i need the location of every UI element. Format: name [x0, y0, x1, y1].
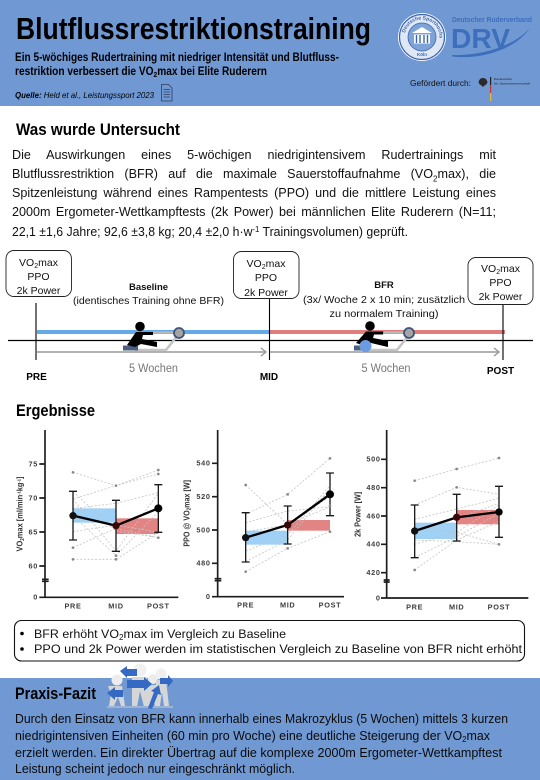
- measurement box PRE: PPO: [27, 271, 50, 283]
- takeaway text: Durch den Einsatz von BFR kann innerhalb eines Makrozyklus (5 Wochen) mittels 3 kurzen: [15, 712, 508, 726]
- subtitle: max bei Elite Ruderern: [157, 66, 267, 78]
- y axis label: max [W]: [181, 480, 191, 508]
- tick labels: 460: [366, 511, 381, 520]
- tick labels: POST: [147, 601, 170, 610]
- y axis label: max [ml/min: [15, 495, 25, 538]
- funding note: Gefördert durch:: [410, 78, 471, 88]
- source citation: Quelle: Held et al., Leistungssport 2023: [15, 90, 154, 100]
- icon: document: [162, 84, 172, 101]
- key findings box: BFR erhöht VO: [34, 627, 117, 641]
- key findings box: [14, 620, 524, 661]
- chart: 2k Power: [353, 430, 528, 611]
- header band: [0, 0, 540, 106]
- marker lines: [36, 299, 503, 360]
- takeaway text: max: [467, 729, 491, 743]
- measurement box MID: 2: [262, 264, 266, 271]
- key findings box: max im Vergleich zu Baseline: [124, 627, 286, 641]
- band: baseline change: [73, 508, 116, 523]
- band: baseline change: [415, 523, 457, 539]
- logo: Deutscher Ruderverband DRV: DRV: [451, 23, 510, 54]
- key findings box: 2: [119, 633, 124, 642]
- phase bar: BFR: [269, 330, 505, 334]
- subtitle: Ein 5-wöchiges Rudertraining mit niedriger Intensität und Blutfluss-: [15, 52, 339, 64]
- tick labels: 75: [28, 459, 38, 468]
- y axis label: 2: [187, 508, 193, 510]
- label: Baseline: (identisches Training ohne BFR): [73, 295, 224, 307]
- logo: Bundesinstitut für Sportwissenschaft: Bundesinstitut: [494, 77, 512, 81]
- tick labels: POST: [319, 600, 341, 609]
- axes: [212, 430, 344, 597]
- measurement box POST: 2k Power: [479, 291, 523, 303]
- icon: rower baseline: [123, 322, 184, 350]
- axes: [39, 430, 178, 597]
- y axis label: 2: [20, 538, 26, 541]
- study description paragraph: [12, 148, 496, 239]
- phase bar: Baseline: [37, 330, 269, 334]
- tick labels: [196, 459, 341, 609]
- measurement box POST: [468, 258, 533, 304]
- tick labels: MID: [280, 600, 295, 609]
- measurement box PRE: [6, 250, 72, 297]
- tick labels: 520: [196, 492, 211, 501]
- tick labels: PRE: [237, 600, 254, 609]
- tick labels: PRE: [406, 602, 423, 611]
- band: BFR change: [288, 520, 330, 531]
- logo: Deutsche Sporthochschule Köln: [398, 13, 446, 61]
- label: BFR: zu normalem Training): [330, 308, 438, 320]
- y axis label: PPO @ VO: [181, 503, 191, 547]
- tick labels: 0: [33, 593, 38, 602]
- subtitle: restriktion verbessert die VO: [15, 66, 172, 78]
- study timeline: [6, 250, 533, 383]
- chart: VO2max: [15, 430, 178, 610]
- study description paragraph: Trainingsvolumen) geprüft.: [259, 225, 408, 239]
- title: Blutflussrestriktionstraining: [16, 11, 371, 46]
- label: Baseline: [73, 282, 224, 307]
- takeaway text: niedrigintensiven Einheiten (60 min pro Woche) eine deutliche Steigerung der VO: [15, 729, 468, 743]
- tick labels: 65: [28, 527, 38, 536]
- measurement box MID: PPO: [255, 272, 277, 284]
- label: 5 Wochen left: 5 Wochen: [129, 363, 178, 375]
- heading: Praxis-Fazit: Praxis-Fazit: [15, 685, 96, 703]
- mean line with error bars: [411, 457, 503, 571]
- tick labels: MID: [449, 602, 464, 611]
- measurement box POST: max: [500, 263, 521, 275]
- tick labels: MID: [108, 601, 124, 610]
- individual athletes: [73, 470, 158, 559]
- measurement box PRE: VO: [19, 257, 34, 269]
- mean line with error bars: [69, 469, 162, 561]
- mean line with error bars: [242, 457, 334, 573]
- label: BFR: [303, 280, 465, 320]
- measurement box PRE: max: [38, 257, 59, 269]
- band: BFR change: [116, 518, 158, 534]
- tick labels: 480: [366, 483, 381, 492]
- time axis: [8, 340, 533, 342]
- measurement box POST: VO: [481, 263, 496, 275]
- band: BFR change: [457, 510, 499, 524]
- icon: rower BFR with blue cuff: [354, 321, 414, 352]
- measurement box MID: max: [266, 258, 286, 270]
- logo: Deutscher Ruderverband DRV: [451, 15, 532, 57]
- study description paragraph: 22,1 ±1,6 Jahre; 92,6 ±3,8 kg; 20,4 ±2,0 h·w: [12, 225, 259, 239]
- takeaway text: 2: [462, 735, 467, 744]
- tick labels: PRE: [64, 601, 82, 610]
- logo: Deutsche Sporthochschule Köln: Köln: [417, 52, 427, 57]
- y axis label: 2k Power [W]: [353, 492, 363, 537]
- label: POST: POST: [487, 366, 514, 377]
- y axis label: -1: [16, 491, 21, 495]
- tick labels: 500: [366, 455, 381, 464]
- individual athletes: [415, 458, 499, 570]
- y axis label: ]: [15, 476, 25, 479]
- measurement box PRE: 2: [34, 263, 38, 270]
- measurement box POST: PPO: [489, 277, 512, 289]
- takeaway text: Leistung scheint jedoch nur eingeschränkt möglich.: [15, 762, 295, 776]
- tick labels: 440: [366, 540, 381, 549]
- tick labels: 70: [28, 493, 38, 502]
- label: MID: MID: [260, 372, 278, 383]
- heading: Ergebnisse: Ergebnisse: [16, 402, 95, 420]
- subtitle: 2: [154, 70, 157, 79]
- study description paragraph: -1: [252, 225, 260, 234]
- study description paragraph: 2000m Ergometer-Wettkampftests (2k Power) bei männlichen Elite Ruderern (N=11;: [12, 205, 496, 219]
- y axis label: kg: [15, 483, 25, 491]
- arrow: Baseline 5 weeks: [37, 348, 266, 356]
- practical takeaway band: [0, 678, 540, 780]
- band: baseline change: [246, 531, 288, 545]
- measurement box POST: 2: [496, 269, 500, 276]
- tick labels: 60: [28, 561, 38, 570]
- logo: Bundesinstitut für Sportwissenschaft: [478, 77, 530, 101]
- tick labels: 0: [206, 592, 211, 601]
- measurement box MID: [234, 252, 299, 299]
- tick labels: [28, 459, 170, 610]
- individual athletes: [246, 458, 330, 572]
- takeaway text: erzielt werden. Ein direkter Übertrag auf die komplexe 2000m Ergometer-Wettkampftest: [15, 746, 502, 760]
- chart: PPO: [181, 430, 344, 609]
- tick labels: 480: [196, 559, 211, 568]
- study description paragraph: Spitzenleistung während eines Rampentests (PPO) und die mittlere Leistung eines: [12, 186, 496, 200]
- tick labels: 540: [196, 459, 211, 468]
- tick labels: 420: [366, 568, 381, 577]
- subtitle: [15, 52, 339, 79]
- measurement box MID: VO: [247, 258, 262, 270]
- label: BFR: BFR: [374, 280, 394, 291]
- tick labels: 0: [376, 593, 381, 602]
- logo: Bundesinstitut für Sportwissenschaft: für Sportwissenschaft: [494, 82, 530, 86]
- measurement box PRE: 2k Power: [17, 285, 61, 297]
- y axis label: VO: [15, 539, 25, 551]
- logo: Deutscher Ruderverband DRV: Deutscher Ruderverband: [452, 15, 532, 24]
- key findings box: PPO und 2k Power werden im statistischen Vergleich zu Baseline von BFR nicht erhöht: [34, 642, 523, 656]
- label: Baseline: Baseline: [129, 282, 168, 293]
- tick labels: POST: [488, 602, 510, 611]
- tick labels: 500: [196, 525, 211, 534]
- axes: [381, 430, 528, 598]
- study description paragraph: Die Auswirkungen eines 5-wöchigen niedrigintensivem Rudertrainings mit: [12, 148, 496, 162]
- measurement box MID: 2k Power: [244, 287, 288, 299]
- label: BFR: (3x/ Woche 2 x 10 min; zusätzlich: [303, 294, 465, 306]
- study description paragraph: Blutflussrestriktion (BFR) auf die maximale Sauerstoffaufnahme (VO2max), die: [12, 167, 496, 184]
- icon: figures holding arrows: [107, 664, 173, 709]
- arrow: BFR 5 weeks: [270, 348, 499, 356]
- label: PRE: PRE: [26, 372, 47, 383]
- takeaway text: [15, 712, 508, 776]
- heading: Was wurde Untersucht: Was wurde Untersucht: [16, 121, 180, 139]
- label: 5 Wochen right: 5 Wochen: [362, 363, 410, 375]
- y axis label: -1: [16, 479, 21, 483]
- tick labels: [366, 455, 510, 611]
